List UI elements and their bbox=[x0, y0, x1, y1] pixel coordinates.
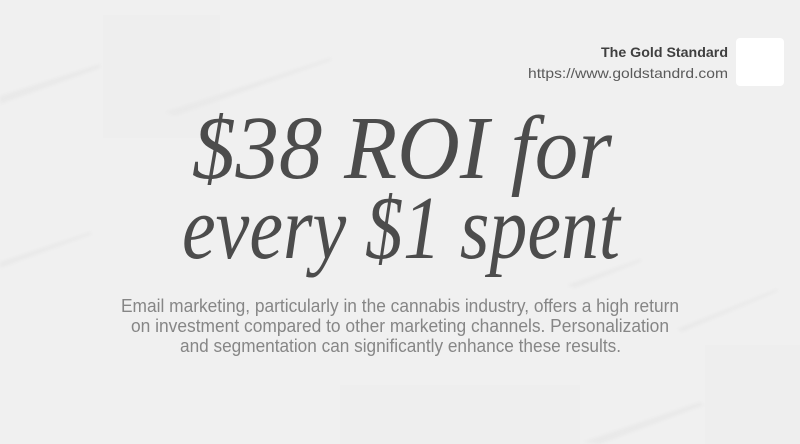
description text: and segmentation can significantly enhance these results. bbox=[180, 336, 621, 356]
description text bbox=[121, 296, 679, 356]
title: $38 ROI for bbox=[192, 99, 613, 198]
brand url: https://www.goldstandrd.com bbox=[528, 65, 728, 81]
description text: on investment compared to other marketing channels. Personalization bbox=[131, 316, 669, 336]
title bbox=[182, 99, 622, 278]
title: every $1 spent bbox=[182, 179, 622, 278]
description text: Email marketing, particularly in the cannabis industry, offers a high return bbox=[121, 296, 679, 316]
brand name: The Gold Standard bbox=[601, 45, 728, 60]
logo placeholder bbox=[736, 38, 784, 86]
